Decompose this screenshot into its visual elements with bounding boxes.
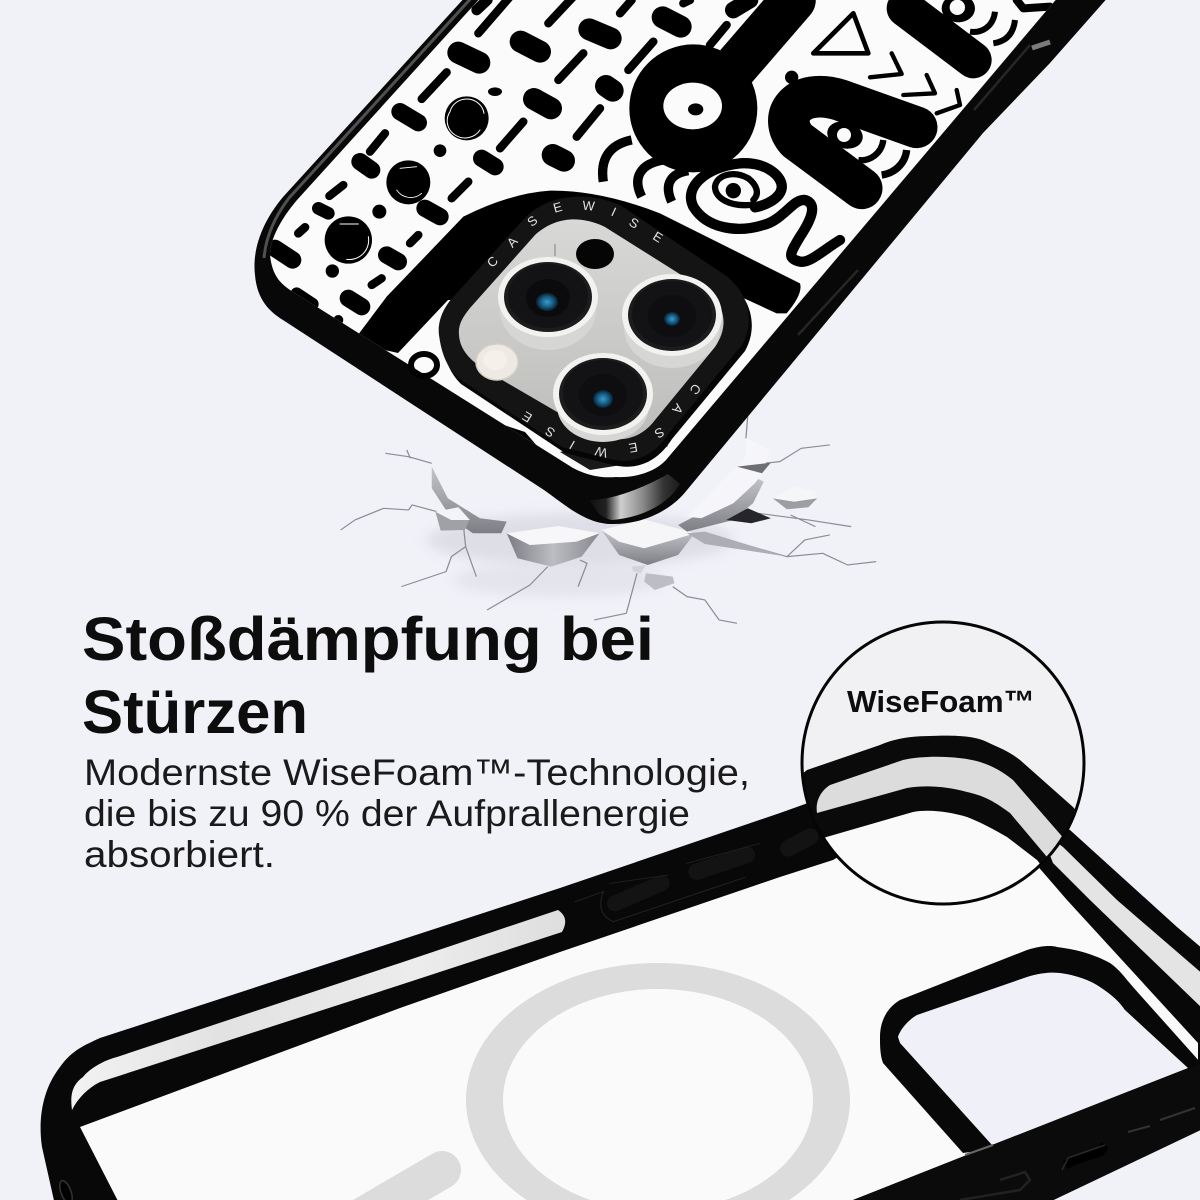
magnified rail — [804, 736, 1075, 902]
left rim — [432, 467, 507, 533]
flash — [476, 344, 518, 380]
side buttons — [575, 837, 810, 922]
chunk c — [601, 530, 695, 565]
left slot — [71, 910, 565, 1110]
crack lines — [341, 417, 876, 623]
body text: Modernste WiseFoam™-Technologie, — [84, 752, 750, 793]
chunk b — [507, 533, 600, 567]
fragment d — [632, 565, 646, 573]
small ring on pattern — [411, 354, 437, 376]
magnifier outline — [802, 622, 1084, 904]
magsafe ring — [466, 963, 850, 1200]
lens 1 — [498, 257, 598, 350]
magnifier fill — [802, 622, 1084, 904]
donut — [629, 0, 793, 172]
side hole — [57, 1179, 75, 1200]
body text: die bis zu 90 % der Aufprallenergie — [84, 793, 690, 834]
rim highlight — [590, 474, 680, 520]
fat dashes — [458, 17, 681, 161]
case rim — [254, 0, 1110, 524]
dark wedge — [737, 463, 771, 473]
spiral — [691, 163, 840, 262]
rail details — [960, 1108, 1195, 1200]
u-shape — [789, 97, 917, 188]
top phone case — [254, 0, 1110, 524]
thin dashes — [329, 0, 727, 285]
big band — [357, 191, 801, 353]
chevrons — [870, 53, 960, 113]
body text: absorbiert. — [84, 834, 275, 875]
wedge g — [687, 532, 787, 557]
callout: wisefoam magnifier — [800, 620, 1086, 906]
eye — [827, 122, 863, 149]
bottom clear case — [41, 770, 1200, 1200]
side button details — [798, 42, 1050, 335]
rim edge line — [264, 0, 474, 258]
right slot — [1040, 830, 1200, 1011]
tribal pattern — [275, 0, 1050, 470]
dots — [325, 71, 798, 325]
curved ticks — [603, 140, 688, 202]
right rim — [678, 477, 764, 532]
lens 2 — [622, 274, 722, 368]
body text — [84, 752, 750, 875]
clear panel — [80, 820, 1198, 1200]
heading — [82, 605, 654, 746]
heading: Stoßdämpfung bei — [82, 605, 654, 673]
wisefoam label: WiseFoam™ — [847, 684, 1035, 719]
lens 3 — [553, 353, 653, 442]
casewise lettering bottom: CASEWISE — [519, 381, 704, 461]
camera housing — [439, 197, 752, 467]
triangle — [813, 13, 868, 53]
frame — [41, 770, 1200, 1200]
top-right band — [905, 8, 973, 60]
camera window — [880, 946, 1200, 1153]
pattern bits under camera — [498, 423, 668, 470]
chunk a — [435, 512, 469, 531]
magsafe tag — [365, 1170, 442, 1200]
lidar — [576, 239, 614, 269]
mic — [554, 244, 556, 256]
heading: Stürzen — [82, 678, 308, 746]
back panel — [270, 0, 1060, 477]
casewise lettering top: CASEWISE — [484, 198, 666, 270]
bottom rail — [853, 1062, 1200, 1200]
camera plate — [459, 219, 724, 439]
floor crack impact — [341, 417, 876, 623]
fragment f — [773, 498, 817, 509]
